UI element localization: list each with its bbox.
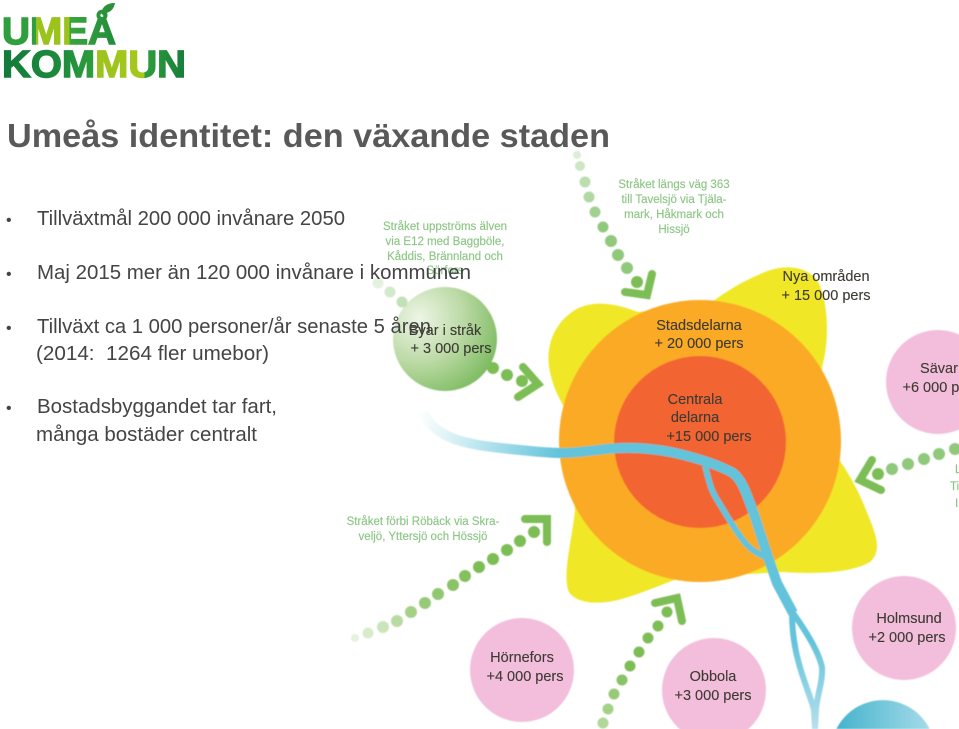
label: Stadsdelarna: + 20 000 pers [654,336,744,352]
river [423,412,822,729]
logo: Umeå kommun [2,3,186,86]
circle: blue coastal area [836,700,930,729]
bullet: growth target: Tillväxtmål 200 000 invånare 2050 [37,208,345,230]
bullet: growth target: • [6,212,12,229]
label: route along road 363: till Tavelsjö via Tjäla- [621,194,727,206]
dotted arrow: west route [372,278,538,397]
logo word: KOMMUN: KOMMUN [2,44,186,86]
label: route past Röbäck: Stråket förbi Röbäck via Skra- [347,516,500,528]
label: route upstream: Stråket uppströms älven [383,221,507,233]
label: east route clipped: I [955,498,958,510]
bullet: yearly growth [6,316,431,365]
label: Obbola: +3 000 pers [674,688,752,704]
label: route past Röbäck: veljö, Yttersjö och Hössjö [359,531,487,543]
label: Nya områden: Nya områden [782,269,870,285]
circle: Byar i stråk [393,287,497,391]
bullet: housing construction: Bostadsbyggandet tar fart, [37,396,277,418]
yellow star: new areas [548,267,877,603]
label: Centrala delarna: delarna [671,410,720,426]
bullet: housing construction: många bostäder centralt [36,424,257,446]
red circle: centrala delarna [614,356,786,528]
logo word: UMEÅ: UMEÅ [2,9,116,53]
title: Umeås identitet: den växande staden [7,117,610,154]
label: route along road 363: Hissjö [658,224,690,236]
text block: bullet list [6,208,471,446]
circle: Obbola [662,638,766,729]
dotted arrow: south route [598,598,682,728]
bullet: yearly growth: Tillväxt ca 1 000 personer/år senaste 5 åren [37,316,431,338]
dotted arrow: east route [860,443,959,490]
label: Sävar: Sävar [920,361,958,377]
label: Byar i stråk: Byar i stråk [409,323,482,339]
label: route upstream: Sörfors [426,265,464,277]
label: Holmsund: Holmsund [876,611,942,627]
bullet: housing construction [6,396,277,446]
dotted arrow: southwest route [351,519,547,642]
bullet: housing construction: • [6,400,12,417]
orange circle: stadsdelarna [559,300,841,582]
bullet: yearly growth: (2014: 1264 fler umebor) [36,343,269,365]
label: Nya områden: + 15 000 pers [781,288,871,304]
circle: Hörnefors [470,618,574,722]
label: route along road 363: Stråket längs väg 363 [618,179,730,191]
diagram: city growth map [351,151,959,729]
label: east route clipped: Ti [950,481,959,493]
label: Hörnefors: Hörnefors [490,650,554,666]
bullet: population 2015: • [6,266,12,283]
bullet: yearly growth: • [6,320,12,337]
label: route along road 363: mark, Håkmark och [624,209,724,221]
bullet: population 2015: Maj 2015 mer än 120 000 invånare i kommunen [37,262,471,284]
label: Byar i stråk: + 3 000 pers [410,341,492,357]
label: Centrala delarna: +15 000 pers [666,429,752,445]
label: route upstream: via E12 med Baggböle, [386,236,504,248]
label: Obbola: Obbola [690,669,737,685]
circle: Sävar [886,330,959,434]
label: route upstream: Kåddis, Brännland och [387,251,503,263]
label: Hörnefors: +4 000 pers [486,669,564,685]
label: Holmsund: +2 000 pers [868,630,946,646]
label: Stadsdelarna: Stadsdelarna [656,318,743,334]
circle: Holmsund [852,576,956,680]
dotted arrow: north route [573,151,652,295]
icon: leaf [102,3,115,18]
label: Centrala delarna: Centrala [668,392,723,408]
